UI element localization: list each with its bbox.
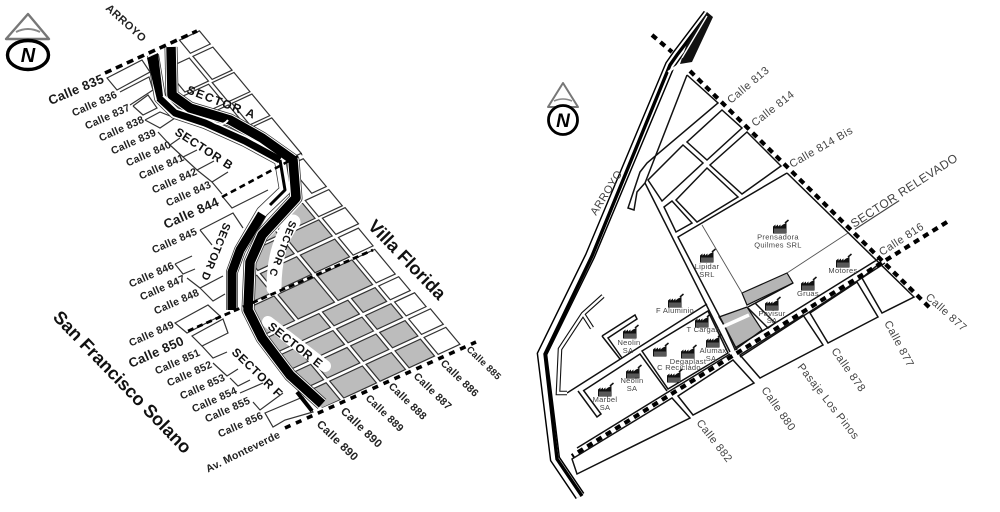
factory: Marbel SA: SA (600, 403, 610, 412)
factory: Degaplast (670, 345, 707, 366)
left street labels: Calle 856 (216, 410, 265, 440)
left street labels: Calle 840 (124, 139, 173, 169)
left street labels: Calle 836 (70, 89, 119, 119)
icon: left north compass: N (21, 45, 36, 67)
winding side path (558, 296, 603, 393)
left street labels: Av. Monteverde (204, 429, 282, 475)
sector labels: SECTOR D (198, 221, 232, 282)
property thin boundaries (702, 225, 848, 293)
factory: Pavisur SA: SA (767, 316, 777, 325)
sector divider dashed lines (105, 31, 476, 428)
survey dashed lines (572, 35, 947, 456)
left street labels: Calle 848 (152, 287, 201, 317)
left street labels: Calle 838 (97, 114, 146, 144)
left street labels: Calle 843 (164, 179, 213, 209)
factory: Gruas (797, 277, 819, 298)
left street labels: Calle 852 (165, 359, 214, 389)
river channel (147, 47, 322, 411)
left street labels: ARROYO (103, 2, 148, 45)
right street labels: Calle 813 (725, 64, 772, 106)
left street labels: Calle 841 (137, 152, 186, 182)
left street labels: Calle 839 (109, 127, 158, 157)
arroyo river (542, 12, 713, 496)
left street labels: Calle 853 (178, 372, 227, 402)
grey surveyed plots (719, 273, 793, 350)
factory: Neolin SA south: SA (627, 384, 637, 393)
factory: Motores: Motores (828, 266, 858, 275)
icon: left north compass (6, 14, 49, 70)
factory: Marbel SA: Marbel (593, 395, 617, 404)
town label: Villa Florida: Villa Florida (364, 216, 451, 304)
factory: Alumax SA: Alumax (700, 346, 726, 355)
right street labels: Calle 814 Bis (788, 125, 855, 171)
factory: Alumax SA: SA (706, 354, 716, 363)
left street labels: Calle 850 (126, 333, 186, 371)
sector labels: SECTOR B (172, 125, 236, 173)
factory: Neolin SA south (620, 365, 644, 393)
right street labels: Calle 877 (881, 319, 916, 369)
factory: Neolin SA north (617, 325, 641, 355)
factory: Gruas: Gruas (797, 289, 819, 298)
left street labels: Calle 887 (411, 371, 454, 413)
factory: T Cargas (686, 314, 720, 334)
factory: Prensadora Quilmes SRL: Quilmes SRL (754, 240, 802, 250)
factory: Degaplast: Degaplast (670, 357, 707, 366)
factory: Lipidar SRL: Lipidar (695, 262, 720, 271)
factory: Lipidar SRL: SRL (699, 270, 715, 279)
right street labels (588, 64, 969, 465)
left street labels: Calle 851 (153, 347, 202, 377)
left street labels: Calle 885 (464, 344, 503, 383)
right street labels: SECTOR RELEVADO (848, 151, 961, 231)
left street labels: Calle 854 (190, 385, 239, 415)
factory: Marbel SA (593, 383, 617, 412)
factory: Pavisur SA (758, 297, 786, 325)
left street labels: Calle 889 (363, 393, 406, 435)
left street labels: Calle 846 (127, 260, 176, 290)
icon: right north compass (548, 83, 578, 134)
sector labels: SECTOR A (185, 83, 258, 122)
right street labels: Calle 880 (759, 385, 798, 433)
sector labels: SECTOR C (266, 219, 298, 278)
factory: Pavisur SA: Pavisur (758, 309, 786, 318)
factory: Alumax SA (700, 334, 726, 363)
factory: F Aluminio: F Aluminio (656, 306, 694, 315)
left street labels: Calle 886 (438, 358, 481, 400)
left street labels: Calle 890 (314, 419, 360, 464)
white blocks along the north-east edge (147, 31, 460, 369)
right street labels: ARROYO (588, 168, 625, 218)
right street labels: Calle 816 (877, 221, 926, 259)
white stripe street over grey plot (720, 315, 749, 328)
left map (6, 2, 503, 475)
sector labels (172, 83, 326, 400)
grey sector blocks (254, 202, 436, 408)
factory: C Reciclado: C Reciclado (657, 363, 701, 372)
town label: San Francisco Solano: San Francisco Solano (49, 307, 196, 457)
left street labels: Calle 845 (150, 226, 199, 256)
left street labels (46, 2, 503, 475)
factory: unnamed unit (653, 343, 668, 356)
factories with company labels (593, 220, 858, 412)
factory: Prensadora Quilmes SRL (754, 220, 802, 250)
left street labels: Calle 835 (46, 71, 106, 108)
sector labels: SECTOR F (229, 345, 286, 400)
left street labels: Calle 890 (338, 406, 384, 451)
factory: Neolin SA south: Neolin (620, 376, 644, 385)
factory: Motores (828, 254, 858, 275)
factory: C Reciclado (657, 363, 701, 382)
right street labels: Calle 878 (829, 346, 868, 394)
white bands around sector C and E labels (268, 222, 325, 366)
factory: Prensadora Quilmes SRL: Prensadora (757, 232, 799, 242)
right street labels: Calle 814 (749, 89, 797, 129)
western street blocks (107, 60, 313, 427)
sector labels: SECTOR E (265, 319, 326, 371)
right street labels: Calle 882 (694, 417, 734, 465)
icon: right north compass: N (556, 111, 571, 132)
factory: T Cargas: T Cargas (686, 325, 720, 334)
factory: Neolin SA north: Neolin (617, 338, 641, 347)
right street labels: Calle 877 (923, 291, 969, 334)
street blocks (567, 75, 914, 474)
factory: Lipidar SRL (695, 249, 720, 279)
factory: Neolin SA north: SA (623, 346, 633, 355)
left street labels: Calle 837 (83, 102, 132, 132)
left street labels: Calle 888 (386, 381, 429, 423)
factory: F Aluminio (656, 294, 694, 315)
right street labels: Pasaje Los Pinos (795, 361, 861, 442)
left street labels: Calle 849 (127, 319, 176, 349)
left street labels: Calle 842 (150, 166, 199, 196)
left street labels: Calle 847 (138, 273, 187, 303)
right map (542, 12, 969, 496)
left street labels: Calle 855 (203, 395, 252, 425)
left street labels: Calle 844 (161, 194, 222, 232)
